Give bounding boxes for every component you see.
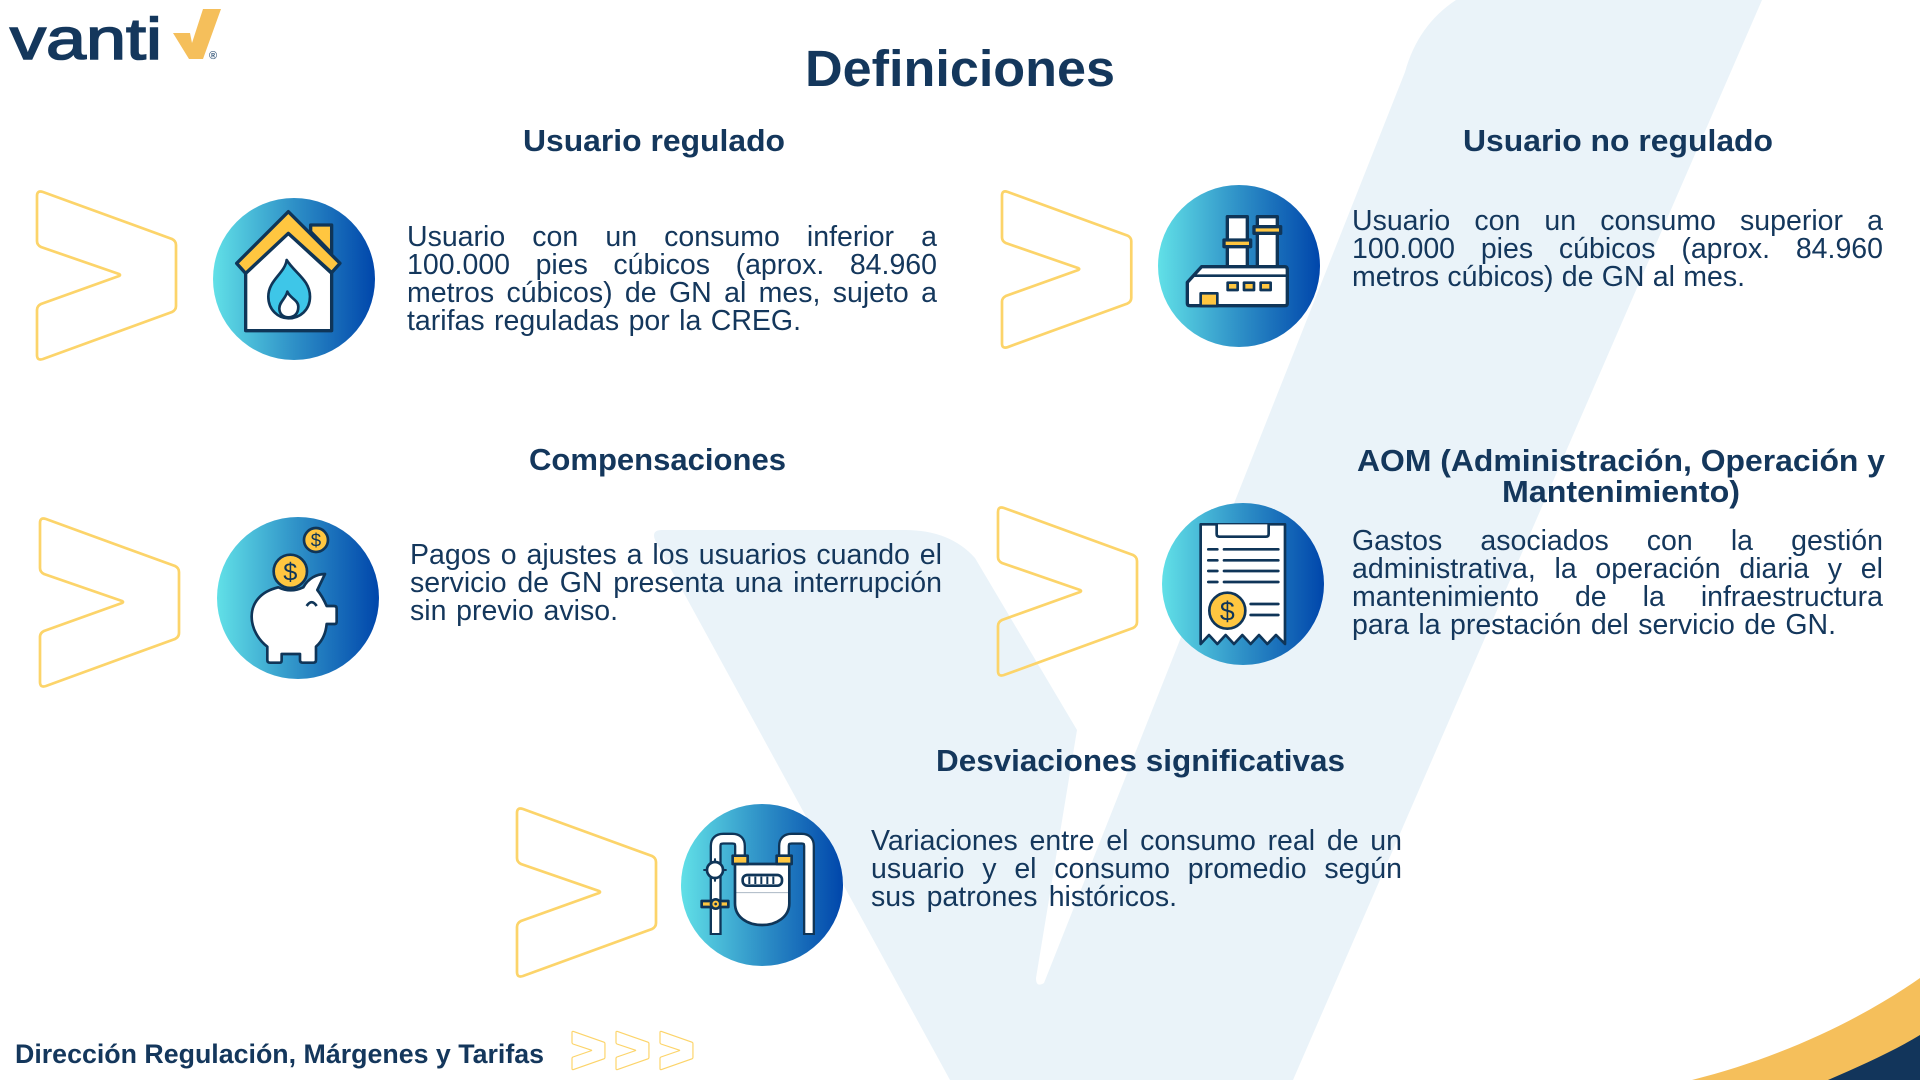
icon: invoice receipt: $	[1220, 596, 1235, 626]
icon: piggy bank: $	[311, 530, 322, 551]
text: Usuario no regulado: 100.000 pies cúbicos (aprox. 84.960	[1352, 233, 1883, 265]
heading: AOM: Mantenimiento)	[1502, 474, 1740, 509]
heading: AOM: AOM (Administración, Operación y	[1357, 443, 1886, 478]
text: Desviaciones significativas: sus patrones históricos.	[871, 881, 1177, 913]
heading: Usuario regulado: Usuario regulado	[523, 123, 785, 158]
footer chevrons	[572, 1031, 693, 1070]
icon: piggy bank: $	[283, 558, 297, 586]
icon: gas meter	[681, 804, 843, 966]
text: Compensaciones: sin previo aviso.	[410, 595, 618, 627]
chevron 4	[998, 508, 1137, 676]
logo: vanti	[10, 7, 221, 72]
text: Compensaciones: Pagos o ajustes a los usuarios cuando el	[410, 539, 942, 571]
heading: Desviaciones significativas: Desviaciones significativas	[936, 743, 1345, 778]
text: Compensaciones	[410, 539, 942, 627]
text: Compensaciones: servicio de GN presenta una interrupción	[410, 567, 942, 599]
text: Usuario regulado: tarifas reguladas por la CREG.	[407, 305, 801, 337]
background check mark watermark	[654, 0, 1762, 1080]
heading: Usuario no regulado: Usuario no regulado	[1463, 123, 1773, 158]
text: Usuario regulado: 100.000 pies cúbicos (aprox. 84.960	[407, 249, 937, 281]
chevron 1	[37, 192, 176, 360]
icon: house with gas flame	[213, 198, 375, 360]
text: Usuario regulado	[407, 221, 937, 337]
icon: invoice receipt	[1162, 503, 1324, 665]
text: Desviaciones significativas	[871, 825, 1402, 913]
text: AOM	[1352, 525, 1883, 641]
corner swoosh	[1692, 978, 1920, 1080]
title: Definiciones	[805, 40, 1115, 97]
chevron 2	[1002, 191, 1131, 348]
logo: vanti: ®	[209, 50, 217, 62]
text: AOM: Gastos asociados con la gestión	[1352, 525, 1883, 557]
icon: piggy bank	[217, 517, 379, 679]
heading: Compensaciones: Compensaciones	[529, 442, 786, 477]
logo: vanti: vanti	[10, 7, 162, 72]
text: Desviaciones significativas: usuario y el consumo promedio según	[871, 853, 1402, 885]
chevron 3	[40, 518, 179, 686]
icon: factory	[1158, 185, 1320, 347]
chevron 5	[517, 808, 656, 976]
text: AOM: para la prestación del servicio de GN.	[1352, 609, 1836, 641]
text: Usuario regulado: Usuario con un consumo inferior a	[407, 221, 937, 253]
text: Usuario no regulado: metros cúbicos) de GN al mes.	[1352, 261, 1745, 293]
text: AOM: administrativa, la operación diaria y el	[1352, 553, 1883, 585]
footer label: Dirección Regulación, Márgenes y Tarifas	[15, 1039, 544, 1069]
text: AOM: mantenimiento de la infraestructura	[1352, 581, 1883, 613]
text: Desviaciones significativas: Variaciones entre el consumo real de un	[871, 825, 1402, 857]
text: Usuario regulado: metros cúbicos) de GN al mes, sujeto a	[407, 277, 937, 309]
heading: AOM	[1357, 443, 1886, 509]
text: Usuario no regulado: Usuario con un consumo superior a	[1352, 205, 1883, 237]
text: Usuario no regulado	[1352, 205, 1883, 293]
